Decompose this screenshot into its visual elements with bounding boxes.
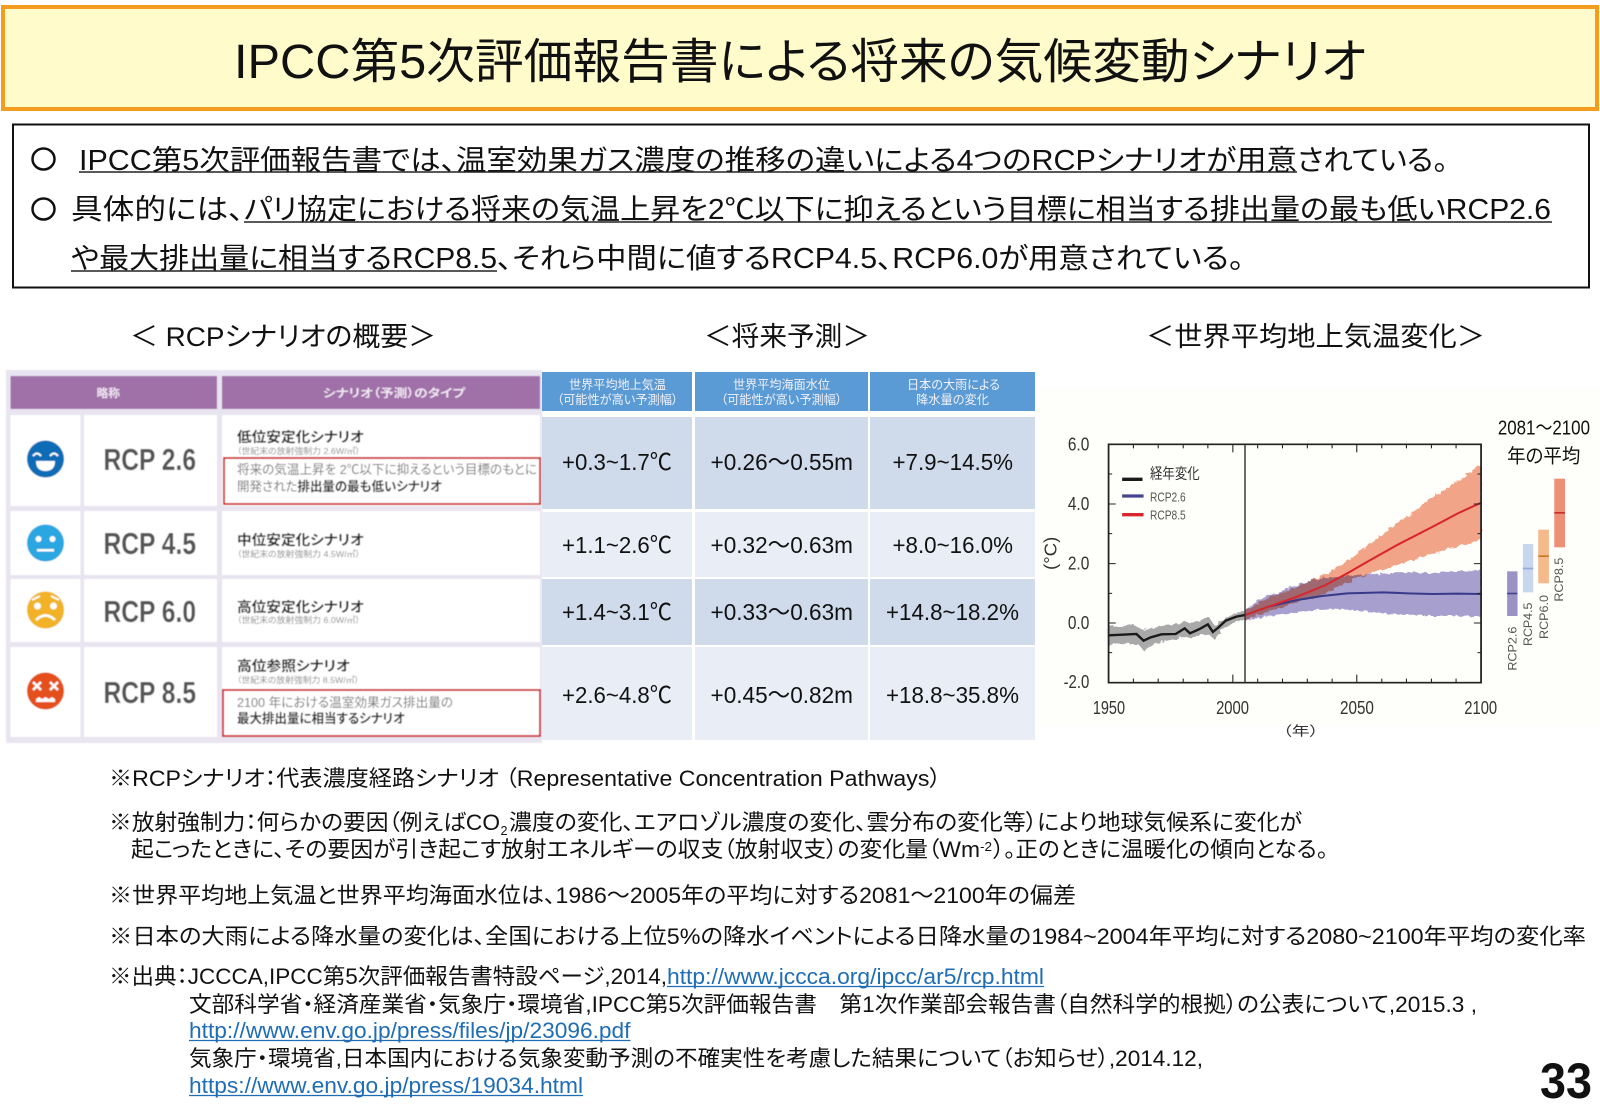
x axis labels xyxy=(1093,698,1497,719)
table header: surface temperature: 世界平均地上気温 xyxy=(569,377,666,392)
legend: 経年変化 xyxy=(1150,466,1200,482)
bullet 2 xyxy=(32,194,1552,275)
table header: scenario type: シナリオ（予測）のタイプ xyxy=(323,386,466,400)
x axis labels: 2100 xyxy=(1464,698,1497,719)
footnote: sources xyxy=(109,964,1477,1098)
bullet 2: パリ協定における将来の気温上昇を2℃以下に抑えるという目標に相当する排出量の最も低いRCP2.6 xyxy=(244,194,1551,226)
row: RCP 2.6: （世紀末の放射強制力 2.6W/㎡） xyxy=(237,446,360,456)
footnote: radiative forcing: -2 xyxy=(980,839,992,854)
row: RCP 6.0: 高位安定化シナリオ xyxy=(237,599,364,615)
x axis labels: 2050 xyxy=(1340,698,1374,719)
callout: maximum emissions scenario xyxy=(223,690,540,736)
table header: sea level: 世界平均海面水位 xyxy=(733,378,830,392)
RCP2.6 mean line xyxy=(1245,592,1481,615)
panel: RCP scenario table xyxy=(6,370,542,743)
heading: RCP scenario overview: ＜ RCPシナリオの概要＞ xyxy=(130,322,436,352)
row: RCP 8.5: 高位参照シナリオ xyxy=(237,658,350,674)
y axis labels: -2.0 xyxy=(1064,672,1089,693)
data row: RCP 6.0 xyxy=(542,579,1035,645)
table header: sea level: （可能性が高い予測幅） xyxy=(721,392,842,407)
callout: lowest emissions scenario: 将来の気温上昇を 2℃以下に抑えるという目標のもとに xyxy=(237,462,537,477)
side bar: RCP6.0 xyxy=(1538,530,1551,639)
callout: maximum emissions scenario: 2100 年における温室効果ガス排出量の xyxy=(237,695,453,710)
footnote: sources: http://www.jccca.org/ipcc/ar5/rcp.html xyxy=(667,964,1044,989)
footnote: radiative forcing: 濃度の変化、エアロゾル濃度の変化、雲分布の変化等）により地球気候系に変化が xyxy=(509,810,1302,835)
footnote: sources: 文部科学省・経済産業省・気象庁・環境省,IPCC第5次評価報告書 第1次作業部会報告書（自然科学的根拠）の公表について,2015.3 , xyxy=(189,992,1477,1017)
footnote: radiative forcing: ）。正のときに温暖化の傾向となる。 xyxy=(993,837,1328,862)
footnote: radiative forcing: ※放射強制力：何らかの要因（例えばCO xyxy=(109,810,500,835)
side bar: RCP2.6 xyxy=(1506,571,1520,671)
data row: RCP 8.5: +0.45～0.82m xyxy=(710,682,853,708)
heading: future projections: ＜将来予測＞ xyxy=(704,322,870,352)
row: RCP 6.0: （世紀末の放射強制力 6.0W/㎡） xyxy=(237,615,360,625)
chart: global mean temperature change xyxy=(1040,387,1600,738)
legend: RCP2.6 xyxy=(1150,490,1186,505)
side bar: RCP8.5: RCP8.5 xyxy=(1553,557,1566,602)
side bar: RCP8.5 xyxy=(1553,479,1566,602)
y axis labels: 6.0 xyxy=(1068,434,1089,455)
footnote: sources: 気象庁・環境省,日本国内における気象変動予測の不確実性を考慮した結果について（お知らせ）,2014.12, xyxy=(189,1046,1203,1071)
footnote: sources: https://www.env.go.jp/press/19034.html xyxy=(189,1073,583,1098)
row: RCP 8.5: RCP 8.5 xyxy=(104,675,196,710)
row: RCP 4.5 xyxy=(10,511,540,575)
data row: RCP 2.6: +7.9~14.5% xyxy=(892,449,1013,475)
bullet 2: 、それら中間に値するRCP4.5、RCP6.0が用意されている。 xyxy=(497,243,1244,275)
callout: lowest emissions scenario: 開発された xyxy=(237,479,298,494)
side bar: RCP4.5 xyxy=(1522,544,1535,646)
callout: lowest emissions scenario xyxy=(224,458,540,504)
data row: RCP 6.0: +14.8~18.2% xyxy=(886,599,1019,625)
RCP8.5 uncertainty band xyxy=(1245,464,1481,621)
table header: surface temperature: （可能性が高い予測幅） xyxy=(557,392,678,407)
table header: heavy rain in Japan: 日本の大雨による xyxy=(907,378,1000,392)
legend xyxy=(1122,466,1200,523)
plot frame and ticks xyxy=(1109,444,1481,683)
x axis labels: 2000 xyxy=(1216,698,1249,719)
x axis labels: 1950 xyxy=(1093,698,1125,719)
reference year line 2005 xyxy=(1243,444,1247,683)
footnote: temperature and sea level baseline: ※世界平均地上気温と世界平均海面水位は、1986～2005年の平均に対する2081～2100年の偏差 xyxy=(109,883,1076,908)
side bar: RCP4.5: RCP4.5 xyxy=(1522,602,1535,646)
panel: summary text xyxy=(13,124,1589,288)
bullet 2: 具体的には、 xyxy=(71,194,244,226)
row: RCP 4.5: RCP 4.5 xyxy=(104,526,196,561)
callout: lowest emissions scenario: 排出量の最も低いシナリオ xyxy=(298,479,442,494)
table header: surface temperature xyxy=(542,372,692,411)
footnote: heavy rain definition: ※日本の大雨による降水量の変化は、全国における上位5%の降水イベントによる日降水量の1984~2004年平均に対する2080~2100年平均の変化率 xyxy=(109,924,1586,949)
footnote: sources: ※出典：JCCCA,IPCC第5次評価報告書特設ページ,2014, xyxy=(109,964,667,989)
data row: RCP 2.6 xyxy=(542,417,1035,509)
table header: abbreviation xyxy=(10,376,217,409)
row: RCP 8.5 xyxy=(10,647,540,737)
row: RCP 2.6: RCP 2.6 xyxy=(104,442,196,477)
row: RCP 4.5: 中位安定化シナリオ xyxy=(237,532,364,548)
panel: future projections table xyxy=(542,372,1035,740)
side heading: 2081-2100 average: 年の平均 xyxy=(1507,445,1580,467)
data row: RCP 4.5 xyxy=(542,512,1035,577)
side bar: RCP6.0: RCP6.0 xyxy=(1538,594,1551,639)
page number: 33 xyxy=(1540,1053,1592,1108)
y axis labels: 0.0 xyxy=(1068,613,1089,634)
historical mean line xyxy=(1109,615,1245,641)
footnote: sources: http://www.env.go.jp/press/files/jp/23096.pdf xyxy=(189,1018,631,1043)
RCP8.5 mean line xyxy=(1245,503,1481,615)
y axis labels: 4.0 xyxy=(1068,494,1089,515)
data row: RCP 4.5: +0.32～0.63m xyxy=(710,532,853,558)
data row: RCP 2.6: +0.26～0.55m xyxy=(710,449,853,475)
row: RCP 6.0 xyxy=(10,579,540,642)
x axis unit: （年） xyxy=(1283,723,1319,738)
side heading: 2081-2100 average xyxy=(1498,417,1590,467)
footnote: radiative forcing xyxy=(109,810,1328,862)
table header: sea level xyxy=(695,372,868,411)
data row: RCP 6.0: +1.4~3.1℃ xyxy=(562,599,672,625)
legend: RCP8.5 xyxy=(1150,508,1186,523)
y axis labels xyxy=(1064,434,1089,693)
title xyxy=(3,7,1597,109)
table header: heavy rain in Japan: 降水量の変化 xyxy=(916,392,989,407)
data row: RCP 6.0: +0.33～0.63m xyxy=(710,599,853,625)
historical uncertainty band xyxy=(1109,611,1245,651)
data row: RCP 8.5 xyxy=(542,647,1035,740)
callout: maximum emissions scenario: 最大排出量に相当するシナリオ xyxy=(237,711,405,726)
row: RCP 8.5: （世紀末の放射強制力 8.5W/㎡） xyxy=(237,675,359,685)
bullet 1: IPCC第5次評価報告書では、温室効果ガス濃度の推移の違いによる4つのRCPシナリオが用意 xyxy=(79,145,1297,177)
data row: RCP 8.5: +2.6~4.8℃ xyxy=(562,682,672,708)
table header: heavy rain in Japan xyxy=(870,372,1035,411)
y axis unit: (°C) xyxy=(1041,537,1061,570)
table header: scenario type xyxy=(222,376,540,409)
title: IPCC第5次評価報告書による将来の気候変動シナリオ xyxy=(234,36,1366,89)
bullet 1: されている。 xyxy=(1297,145,1448,177)
table header: abbreviation: 略称 xyxy=(96,386,121,400)
bullet 2: や最大排出量に相当するRCP8.5 xyxy=(71,243,497,275)
RCP2.6 uncertainty band xyxy=(1245,570,1481,621)
footnote: radiative forcing: 起こったときに、その要因が引き起こす放射エネルギーの収支（放射収支）の変化量（Wm xyxy=(131,837,980,862)
row: RCP 4.5: （世紀末の放射強制力 4.5W/㎡） xyxy=(237,549,360,559)
heading: global mean surface temperature change: ＜世界平均地上気温変化＞ xyxy=(1146,322,1485,352)
icon: neutral face xyxy=(27,524,64,562)
icon: very happy face xyxy=(27,440,64,478)
row: RCP 2.6: 低位安定化シナリオ xyxy=(237,429,364,445)
data row: RCP 4.5: +8.0~16.0% xyxy=(892,532,1013,558)
side bar: RCP2.6: RCP2.6 xyxy=(1506,626,1520,671)
icon: distressed face xyxy=(27,672,64,710)
data row: RCP 2.6: +0.3~1.7℃ xyxy=(562,449,672,475)
row: RCP 6.0: RCP 6.0 xyxy=(104,594,196,629)
y axis labels: 2.0 xyxy=(1068,553,1089,574)
data row: RCP 8.5: +18.8~35.8% xyxy=(886,682,1019,708)
footnote: RCP definition: ※RCPシナリオ：代表濃度経路シナリオ （Representative Concentration Pathways） xyxy=(109,766,941,791)
data row: RCP 4.5: +1.1~2.6℃ xyxy=(562,532,672,558)
row: RCP 2.6 xyxy=(10,415,540,506)
footnote: radiative forcing: 2 xyxy=(500,823,508,838)
icon: worried face xyxy=(27,592,64,628)
